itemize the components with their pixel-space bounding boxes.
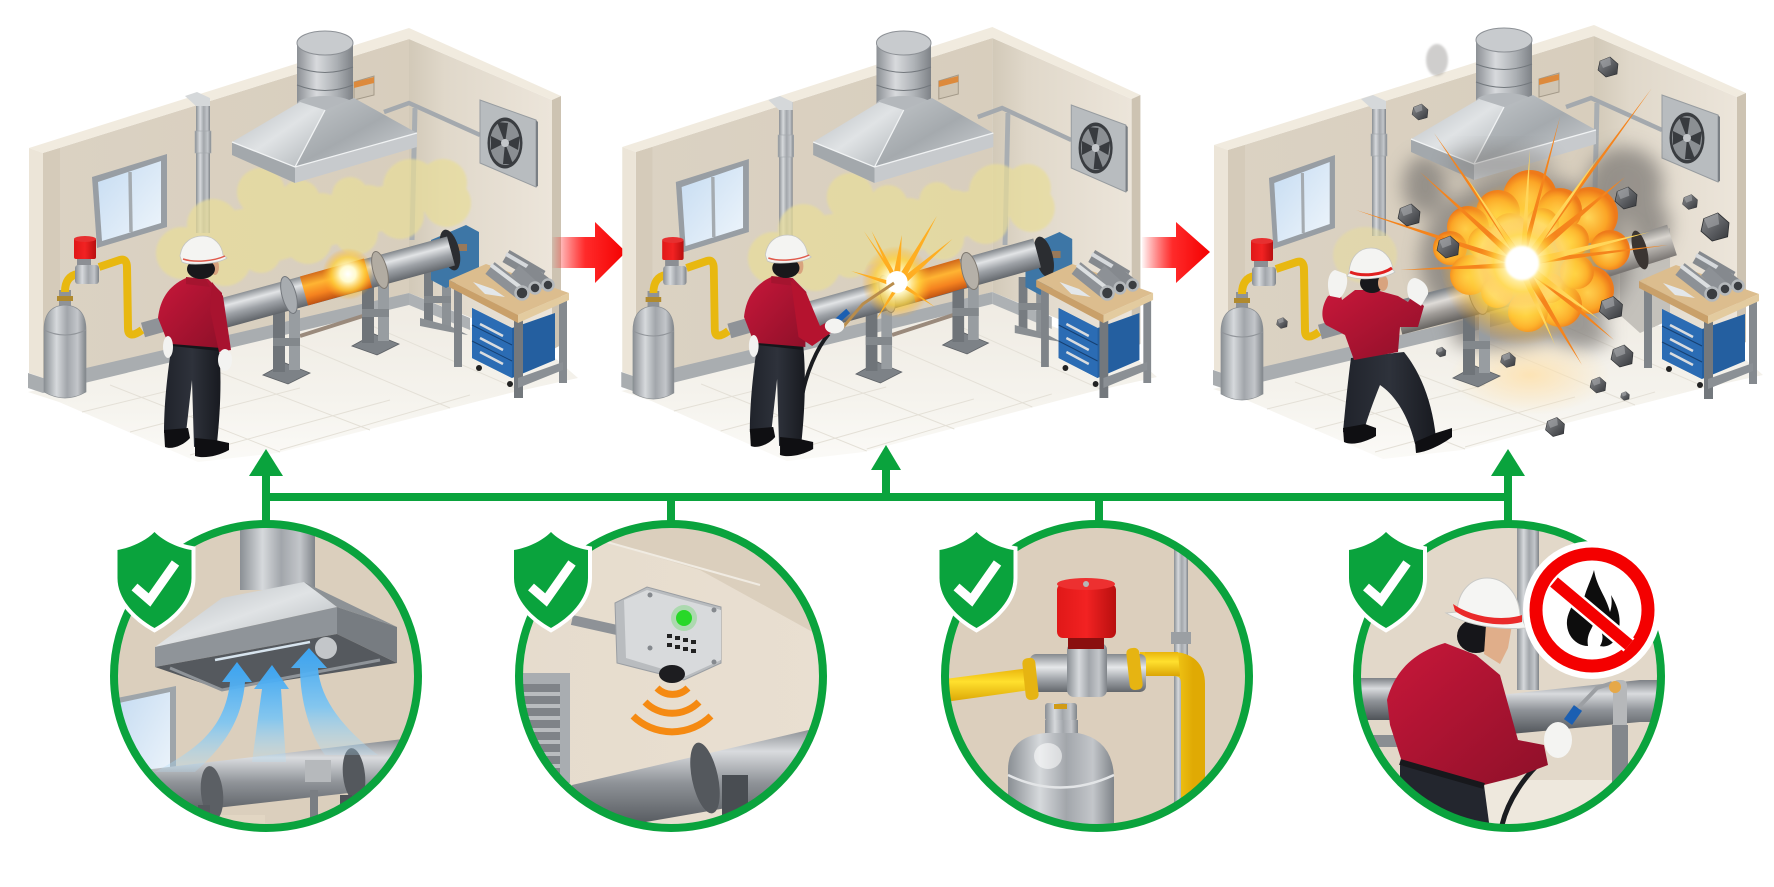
icon: shield check [118, 532, 192, 628]
pipe supports [856, 280, 988, 383]
pipe close-up [572, 730, 809, 822]
spark burst [851, 216, 952, 319]
faded gas remnant [1333, 227, 1397, 283]
worker head and helmet [1446, 578, 1526, 664]
panel: safeguard, ventilation hood [110, 520, 422, 835]
pipe supports [263, 281, 399, 384]
workbench with drawers and tubes [1639, 255, 1759, 399]
connector: green bracket joining safeguards to stages [249, 445, 1525, 522]
workbench with drawers and tubes [1036, 254, 1153, 398]
wall vent [522, 673, 570, 783]
valve body [1022, 643, 1146, 701]
gas detector box [615, 587, 721, 683]
worker in red shirt watching [158, 236, 232, 457]
worker with torch and hose [744, 235, 894, 456]
icon: shield check [940, 532, 1014, 628]
torch hose [1500, 769, 1537, 824]
machine housing [420, 225, 479, 335]
machine housing, pale behind smoke [1620, 228, 1670, 333]
arrow: stage 2 to stage 3 [1142, 222, 1210, 283]
panel: safeguard, gas detector [514, 520, 830, 832]
airflow arrows [155, 648, 378, 772]
pipe with hot section [165, 248, 451, 329]
pipe with hot section [759, 251, 1037, 331]
exhaust hood [232, 31, 417, 183]
icon: shield check [514, 532, 588, 628]
worker bracing from blast [1322, 248, 1452, 453]
gas cylinder and valve [633, 237, 754, 399]
gas cylinder and valve [44, 236, 168, 398]
worker shirt and pants [1387, 643, 1548, 830]
exhaust hood [1411, 28, 1596, 180]
icon: no open flame sign [1523, 541, 1661, 679]
panel: stage 1, gas accumulating near a hot pipe [28, 28, 578, 462]
machine housing [1015, 232, 1072, 342]
panel: safeguard, gas shutoff valve [940, 520, 1253, 835]
pipe close-up [151, 739, 400, 818]
conduit [1171, 550, 1191, 802]
smoke cloud [1403, 147, 1670, 351]
gas cloud [156, 159, 471, 286]
hood close-up [155, 582, 397, 690]
gas cylinder and valve [1221, 238, 1345, 400]
torch [1544, 681, 1621, 758]
conduit [1517, 520, 1539, 690]
panel: safeguard, no open flame [1349, 520, 1665, 832]
arrow: stage 1 to stage 2 [552, 222, 626, 283]
red actuator cap [1057, 578, 1116, 649]
fireball [1356, 88, 1668, 365]
pipe close-up [1361, 678, 1657, 782]
explosion rays [1356, 88, 1668, 365]
exhaust hood [813, 31, 993, 183]
smoke wisp [1426, 44, 1448, 76]
cylinder close-up [1008, 703, 1114, 835]
panel: stage 2, ignition spark at the torch [621, 27, 1157, 461]
yellow gas line [949, 652, 1205, 798]
flying debris [1276, 57, 1729, 436]
gas cloud [748, 164, 1055, 291]
workbench with drawers and tubes [449, 254, 569, 398]
smoke over hood skirt [1445, 147, 1555, 183]
pipe stand and pipe pieces [1398, 229, 1672, 415]
panel: stage 3, explosion [1213, 25, 1763, 459]
sensor signal arcs [633, 688, 711, 732]
detector conduit [572, 620, 617, 630]
icon: shield check [1349, 532, 1423, 628]
